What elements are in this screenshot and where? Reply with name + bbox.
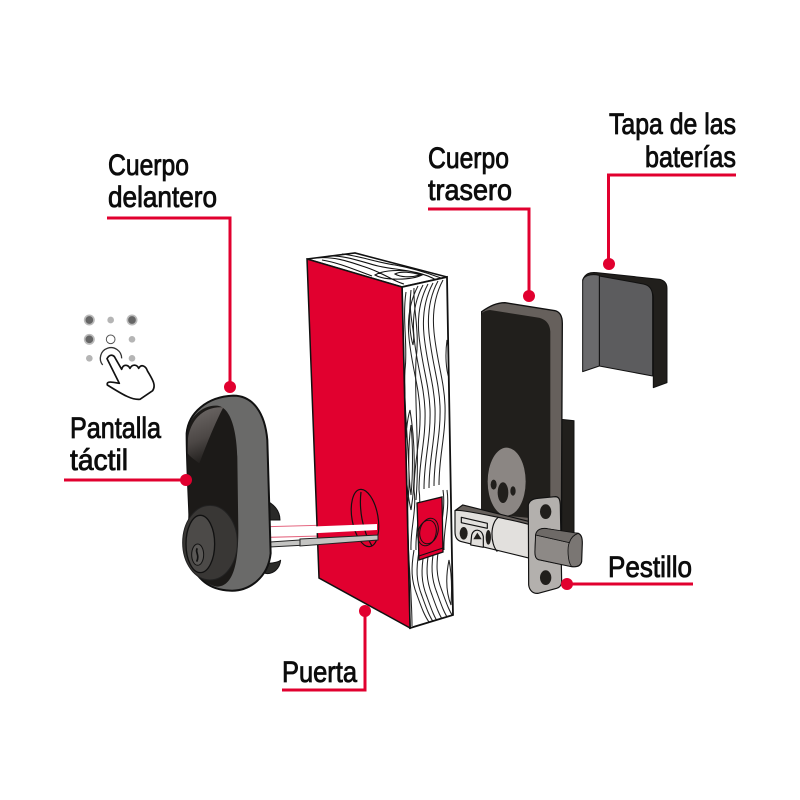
label: Tapa de las baterías: Tapa de las — [609, 108, 736, 141]
door bore hole — [347, 487, 383, 549]
door — [300, 253, 454, 628]
touch screen face — [187, 406, 238, 587]
label: Cuerpo trasero — [428, 142, 535, 302]
label: Cuerpo delantero: Cuerpo — [108, 149, 189, 182]
label: Tapa de las baterías: baterías — [645, 141, 736, 174]
door side wood grain — [402, 277, 454, 628]
label: Cuerpo trasero: trasero — [428, 174, 512, 207]
rear clips — [265, 502, 281, 574]
latch — [455, 497, 582, 593]
front lock body — [183, 396, 320, 591]
label: Cuerpo delantero — [107, 149, 236, 393]
key cylinder — [183, 505, 237, 580]
screen gloss — [188, 407, 223, 463]
label: Pantalla táctil: Pantalla — [70, 412, 161, 445]
battery cover — [583, 273, 667, 388]
label: Pestillo — [561, 551, 693, 590]
rear body face — [481, 310, 550, 520]
label: Puerta: Puerta — [282, 656, 357, 689]
label: Cuerpo delantero: delantero — [108, 181, 217, 214]
rear lock body — [455, 303, 582, 593]
shaft bars — [270, 525, 320, 547]
mounting plate — [488, 448, 526, 516]
bolt — [535, 528, 582, 567]
door front face — [307, 259, 410, 628]
latch face plate — [528, 497, 562, 593]
label: Pestillo: Pestillo — [608, 551, 692, 584]
label: Puerta — [282, 605, 371, 690]
shaft through door — [300, 524, 378, 546]
label: Cuerpo trasero: Cuerpo — [428, 142, 509, 175]
latch pocket on door edge — [415, 497, 443, 560]
door top wood — [307, 253, 447, 287]
label: Pantalla táctil: táctil — [70, 444, 128, 477]
rear housing box — [562, 419, 574, 533]
icon: touch screen dots and hand — [85, 315, 154, 399]
label: Tapa de las baterías — [603, 108, 736, 270]
label: Pantalla táctil — [64, 412, 192, 486]
